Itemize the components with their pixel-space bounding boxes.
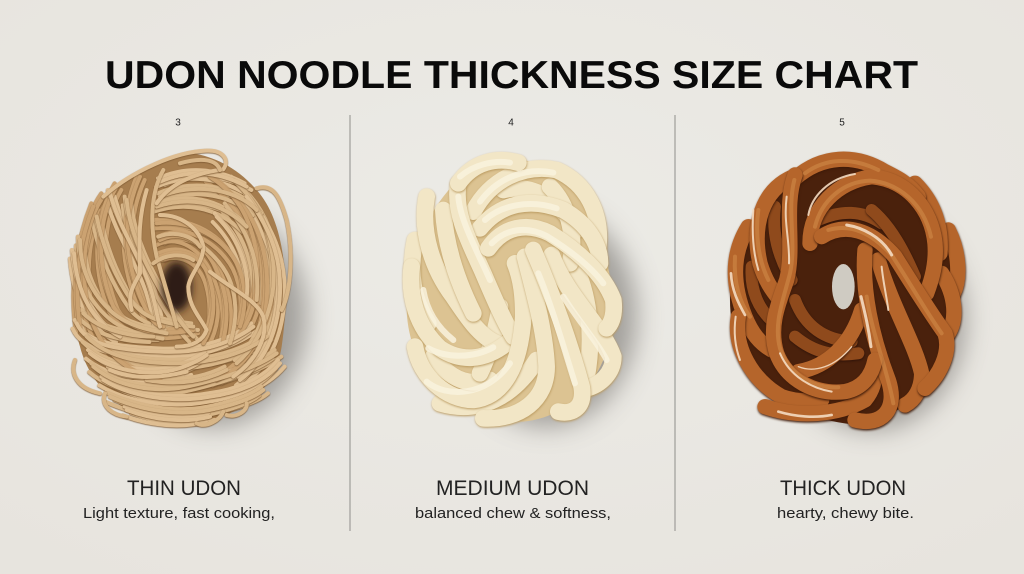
noodle: thin udon [70, 151, 307, 427]
divider: left [350, 115, 351, 531]
description: thin udon: Light texture, fast cooking, [83, 506, 275, 522]
divider: right [674, 115, 676, 531]
label: thick udon [777, 477, 914, 522]
description: thick udon: hearty, chewy bite. [777, 506, 914, 522]
name: thin udon: THIN UDON [127, 477, 241, 500]
size number 3: 3 [175, 118, 181, 128]
noodle: medium udon [407, 160, 637, 427]
noodle: thick udon [730, 157, 965, 430]
description: medium udon: balanced chew & softness, [415, 506, 611, 522]
label: medium udon [415, 477, 611, 522]
size number 5: 5 [839, 118, 845, 128]
size number 4: 4 [508, 118, 514, 128]
label: thin udon [83, 477, 275, 522]
name: medium udon: MEDIUM UDON [436, 477, 589, 500]
name: thick udon: THICK UDON [780, 477, 906, 500]
title: UDON NOODLE THICKNESS SIZE CHART [105, 54, 918, 97]
